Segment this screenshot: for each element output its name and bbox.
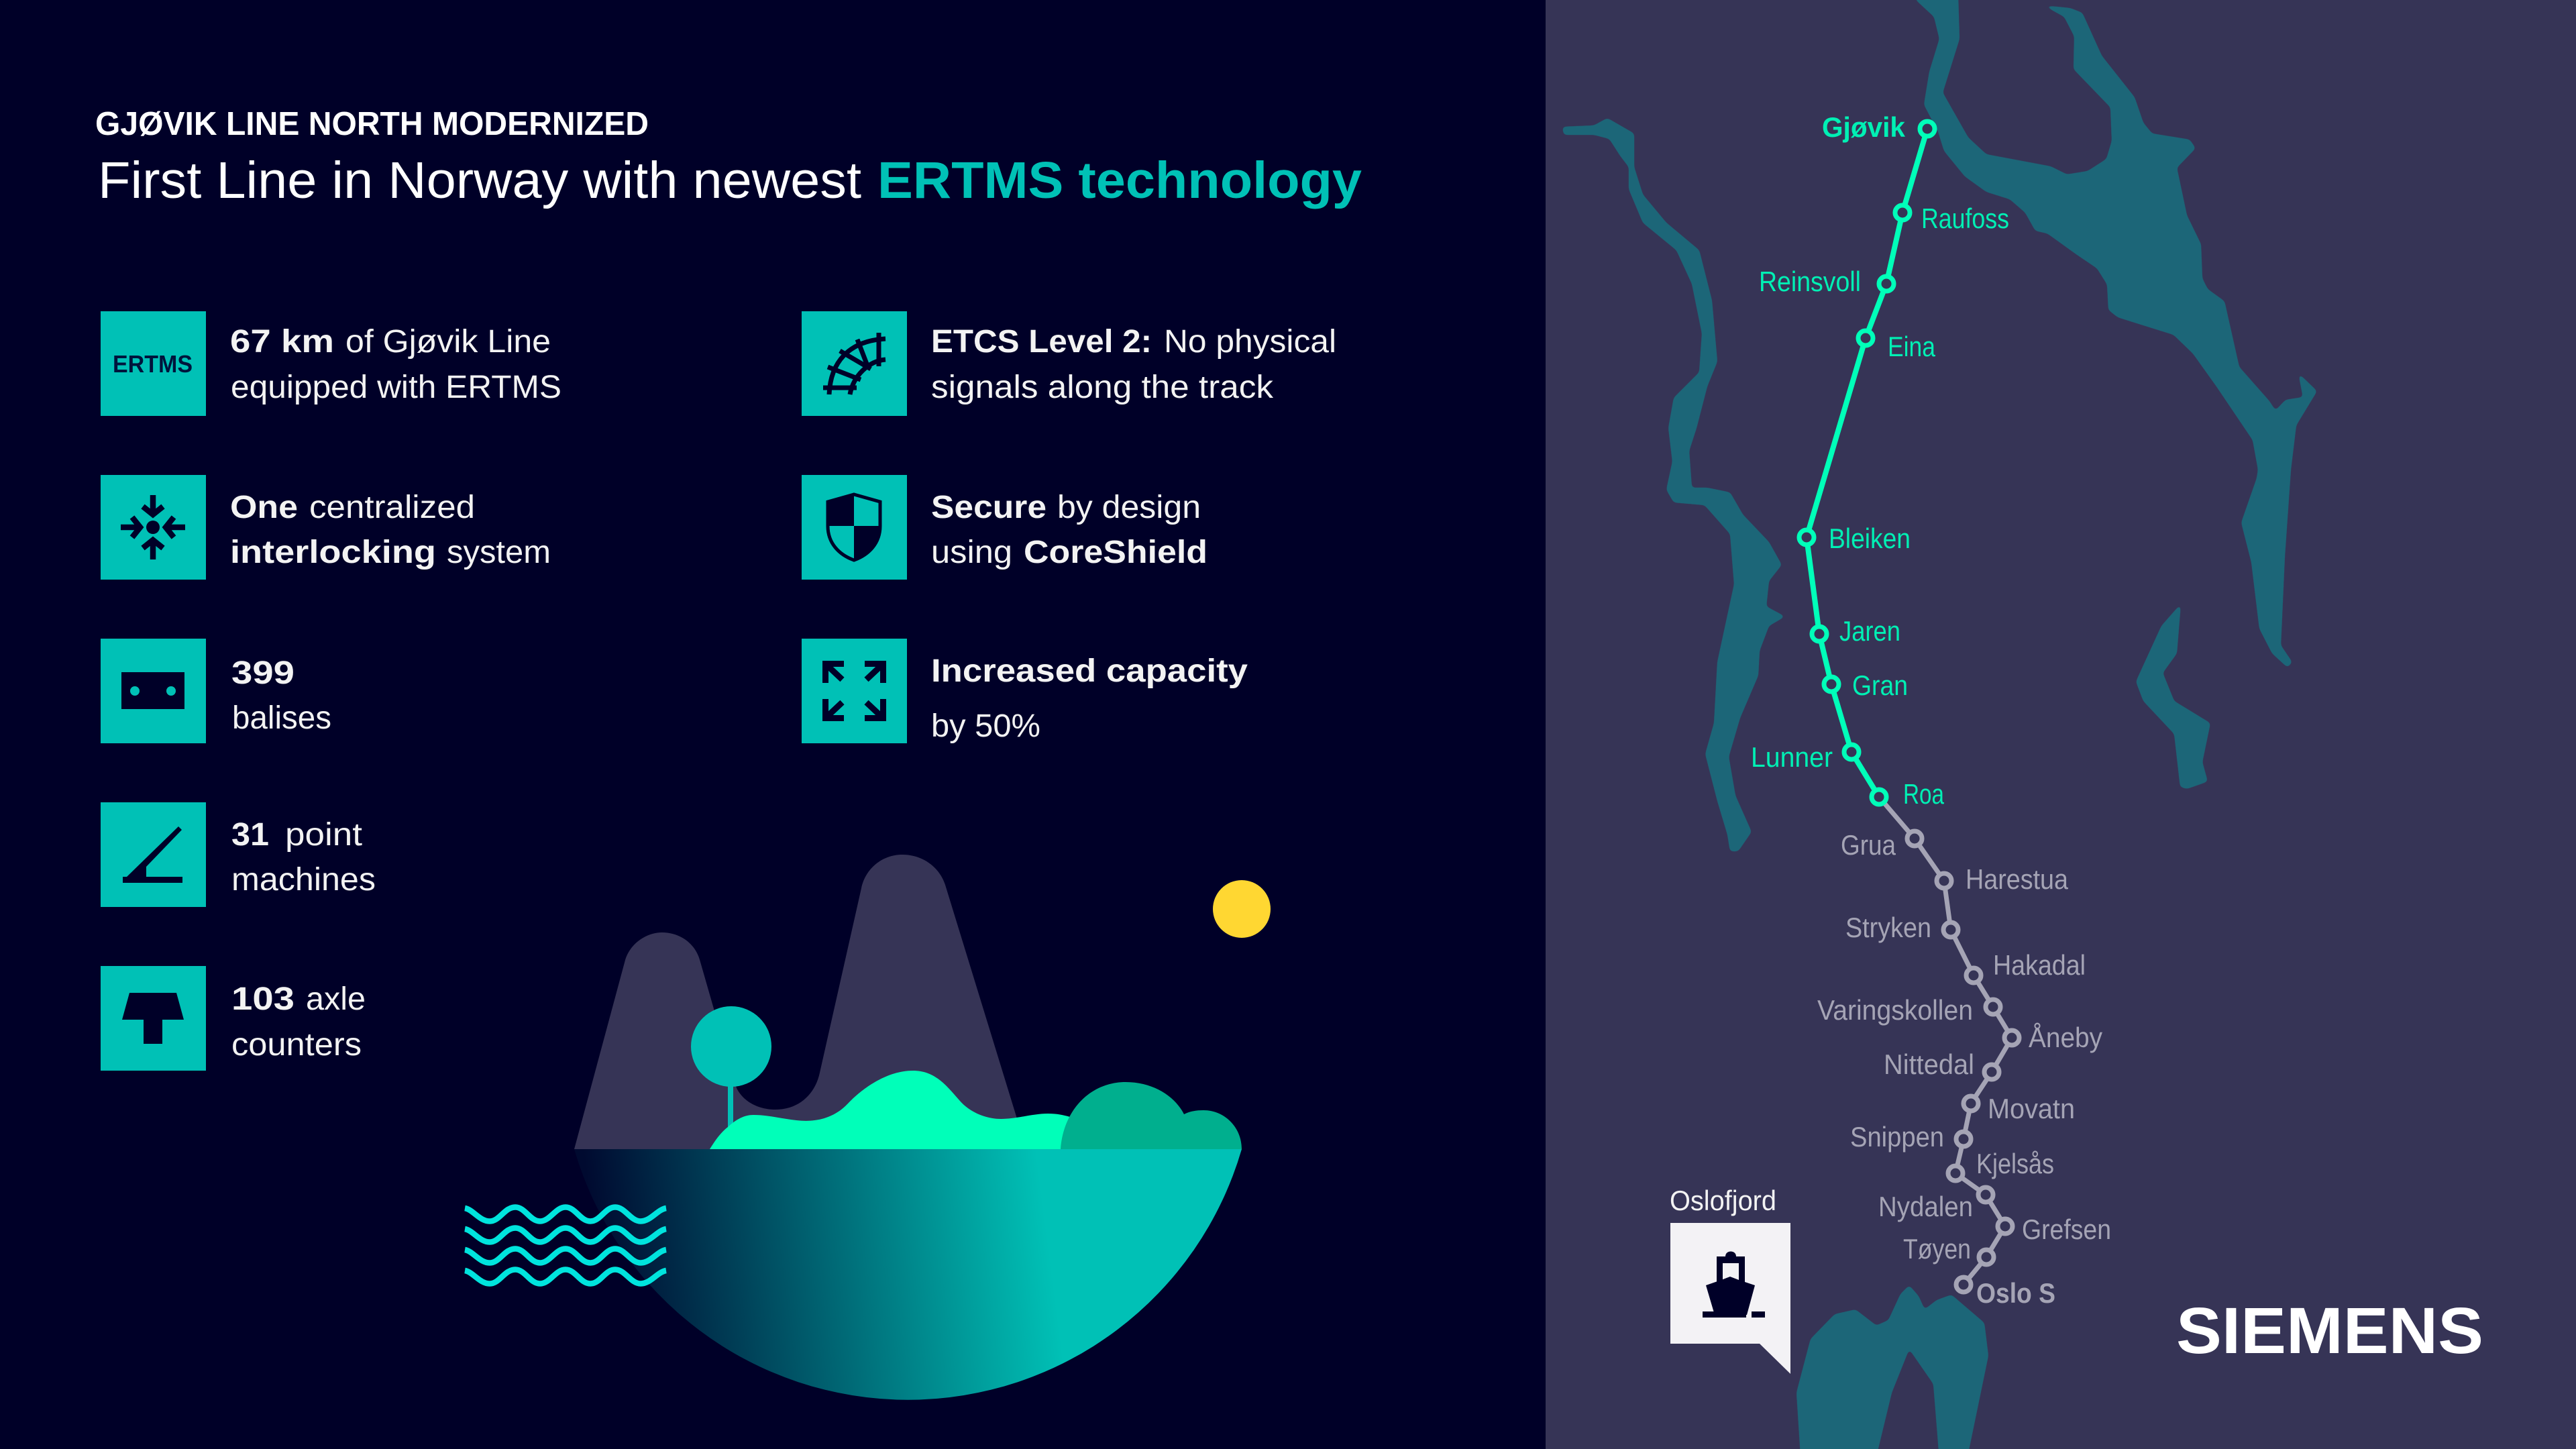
fact: centralized interlocking <box>101 475 551 580</box>
eyebrow heading: GJØVIK LINE NORTH MODERNIZED <box>95 106 649 142</box>
green hill <box>710 1071 1070 1149</box>
text: increased capacity by 50%: by 50% <box>931 708 1040 744</box>
icon: converging arrows <box>101 475 206 580</box>
text: 67 km: of Gjøvik Line <box>345 324 551 360</box>
icon: ERTMS <box>101 311 206 416</box>
text: ETCS level 2: No physical <box>1164 324 1336 360</box>
rail line: southern section <box>1879 797 2012 1285</box>
fact: point machines <box>101 802 376 907</box>
text: ETCS level 2: signals along the track <box>931 370 1274 405</box>
text: one centralized interlocking system: centralized <box>309 490 475 525</box>
text: one centralized interlocking system: system <box>447 535 551 570</box>
tree <box>691 1006 771 1144</box>
station labels: modernized section: Gran <box>1852 669 1908 701</box>
text: 67 km: 67 km <box>230 324 334 360</box>
station labels: modernized section: Bleiken <box>1829 523 1911 554</box>
bushes <box>1061 1082 1242 1149</box>
icon: point machine <box>101 802 206 907</box>
station labels: southern section: Snippen <box>1850 1121 1944 1152</box>
text: 31 point machines: 31 <box>231 817 269 853</box>
text: 103 axle counters: counters <box>231 1027 362 1063</box>
stations: modernized section <box>1799 121 1935 804</box>
text: secure by design: CoreShield <box>1024 535 1208 570</box>
text: one centralized interlocking system: One <box>230 490 298 525</box>
bowl <box>574 1149 1242 1400</box>
icon: shield <box>802 475 907 580</box>
icon: balise <box>101 639 206 743</box>
text: ETCS level 2: ETCS Level 2: <box>931 324 1152 360</box>
main title: ERTMS technology <box>877 152 1362 209</box>
rail line: modernized section <box>1807 129 1927 797</box>
text: 103 axle counters: axle <box>306 981 366 1017</box>
panel: map <box>1546 0 2576 1449</box>
station labels: southern section: Nittedal <box>1884 1049 1974 1080</box>
stations: southern section <box>1907 831 2019 1292</box>
station labels: modernized section: Reinsvoll <box>1759 266 1861 297</box>
panel: facts list <box>101 311 1336 1071</box>
callout: ferry <box>1670 1223 1790 1374</box>
text: 103 axle counters: 103 <box>231 981 294 1017</box>
text: one centralized interlocking system: interlocking <box>230 535 436 570</box>
main title: First Line in Norway with newest <box>98 152 861 209</box>
station labels: modernized section: Jaren <box>1839 615 1900 647</box>
logo: Siemens: SIEMENS <box>2176 1294 2483 1367</box>
icon: expanding arrows <box>802 639 907 743</box>
fact: CoreShield <box>802 475 1208 580</box>
text: 399 balises: balises <box>232 700 331 736</box>
station labels: modernized section: Eina <box>1888 331 1936 362</box>
station labels: southern section: Harestua <box>1966 863 2069 895</box>
icon: ship <box>1703 1252 1765 1318</box>
station labels: southern section: Oslo S <box>1976 1277 2055 1309</box>
station labels: southern section: Nydalen <box>1878 1191 1973 1222</box>
label: Oslofjord: Oslofjord <box>1670 1185 1776 1216</box>
text: 31 point machines: machines <box>231 862 376 898</box>
station labels: southern section: Stryken <box>1845 912 1931 943</box>
text: secure by design: Secure <box>931 490 1046 525</box>
station labels: modernized section: Lunner <box>1751 741 1833 773</box>
illustration: landscape <box>465 855 1271 1400</box>
station labels: southern section: Movatn <box>1988 1093 2075 1124</box>
fact: ETCS level 2 <box>802 311 1336 416</box>
station labels: southern section: Grefsen <box>2022 1214 2111 1245</box>
station labels: southern section: Kjelsås <box>1976 1148 2054 1179</box>
icon: ERTMS: ERTMS <box>113 350 193 378</box>
text: 399 balises: 399 <box>231 655 294 691</box>
station labels: southern section: Åneby <box>2029 1022 2102 1053</box>
fact: axle counters <box>101 966 366 1071</box>
fact: 67 km with ERTMS <box>101 311 561 416</box>
station labels: modernized section: Gjøvik <box>1822 111 1906 143</box>
mountains <box>574 855 1026 1149</box>
sun <box>1213 880 1271 938</box>
station labels: southern section <box>1817 829 2111 1309</box>
waves <box>465 1208 666 1284</box>
text: 67 km: equipped with ERTMS <box>231 370 561 405</box>
station labels: southern section: Hakadal <box>1993 949 2086 981</box>
map background <box>1546 0 2576 1449</box>
icon: axle counter <box>101 966 206 1071</box>
station labels: modernized section: Roa <box>1903 778 1944 810</box>
text: increased capacity by 50%: Increased capacity <box>931 653 1248 689</box>
station labels: southern section: Varingskollen <box>1817 994 1973 1026</box>
fact: increased capacity <box>802 639 1248 744</box>
fact: balises <box>101 639 331 743</box>
station labels: modernized section: Raufoss <box>1921 203 2009 234</box>
station labels: modernized section <box>1751 111 2009 810</box>
lakes <box>1562 0 2317 1449</box>
text: secure by design: by design <box>1057 490 1201 525</box>
text: 31 point machines: point <box>285 817 362 853</box>
text: secure by design: using <box>931 535 1012 570</box>
icon: curved track <box>802 311 907 416</box>
station labels: southern section: Grua <box>1841 829 1896 861</box>
station labels: southern section: Tøyen <box>1903 1233 1971 1265</box>
